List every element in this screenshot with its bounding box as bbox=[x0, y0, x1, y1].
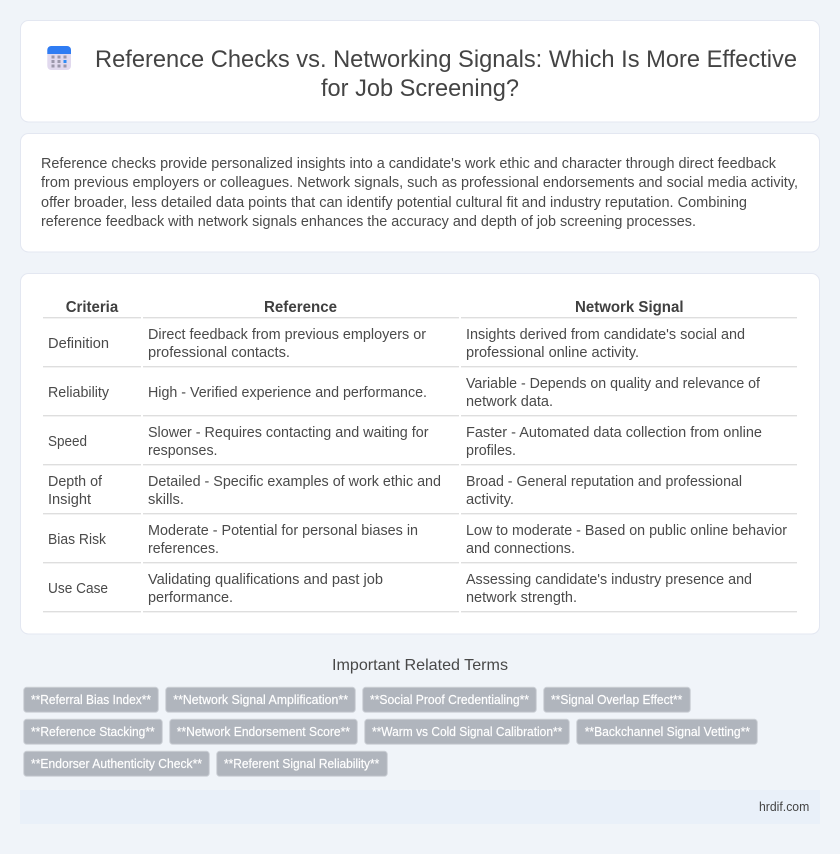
text block: introduction: Reference checks provide personalized insights into a candidate's work ethic and character through direct feedback bbox=[41, 156, 777, 172]
table row: speed: responses. bbox=[148, 443, 218, 459]
table row: use case: performance. bbox=[148, 590, 233, 606]
tag bbox=[217, 751, 387, 776]
tag bbox=[544, 687, 690, 712]
table row: depth of insight: Detailed - Specific examples of work ethic and bbox=[148, 474, 441, 490]
text block: introduction: reference feedback with network signals enhances the accuracy and depth of job screening processes. bbox=[41, 214, 696, 230]
tag bbox=[24, 751, 209, 776]
tag: **Social Proof Credentialing** bbox=[370, 692, 529, 707]
table row: speed: Slower - Requires contacting and waiting for bbox=[148, 425, 429, 441]
tag bbox=[363, 687, 536, 712]
table row: bias risk: Bias Risk bbox=[48, 532, 107, 548]
panel: comparison table bbox=[20, 274, 820, 634]
tag: **Endorser Authenticity Check** bbox=[31, 756, 202, 771]
table row: use case bbox=[48, 572, 752, 606]
table row: depth of insight: activity. bbox=[466, 492, 514, 508]
tag: **Referent Signal Reliability** bbox=[224, 756, 379, 771]
table row: speed: Speed bbox=[48, 434, 87, 450]
tag bbox=[365, 719, 569, 744]
table row: use case: Assessing candidate's industry presence and bbox=[466, 572, 752, 588]
title: Reference Checks vs. Networking Signals: Which Is More Effective bbox=[95, 46, 797, 73]
table row: definition: Definition bbox=[48, 336, 109, 352]
tag bbox=[166, 687, 355, 712]
table row: use case: network strength. bbox=[466, 590, 577, 606]
table row: bias risk: Moderate - Potential for personal biases in bbox=[148, 523, 418, 539]
table row: bias risk: Low to moderate - Based on public online behavior bbox=[466, 523, 787, 539]
table row: depth of insight bbox=[48, 474, 742, 508]
title bbox=[95, 46, 797, 102]
panel: title header bbox=[20, 20, 820, 122]
tag bbox=[24, 687, 158, 712]
text block: introduction bbox=[41, 156, 798, 230]
table row: definition: Insights derived from candidate's social and bbox=[466, 327, 745, 343]
tag: **Network Endorsement Score** bbox=[177, 724, 350, 739]
footer bbox=[20, 790, 820, 824]
table header: Reference bbox=[264, 299, 337, 316]
table row: definition: professional online activity. bbox=[466, 345, 639, 361]
tag: **Network Signal Amplification** bbox=[173, 692, 348, 707]
table row: depth of insight: Broad - General reputation and professional bbox=[466, 474, 742, 490]
title: for Job Screening? bbox=[321, 75, 519, 102]
table row: depth of insight: Depth of bbox=[48, 474, 103, 490]
tag: **Backchannel Signal Vetting** bbox=[585, 724, 750, 739]
table row: reliability bbox=[48, 376, 761, 410]
tag: **Referral Bias Index** bbox=[31, 692, 151, 707]
table row: speed: Faster - Automated data collection from online bbox=[466, 425, 762, 441]
table row: speed bbox=[48, 425, 762, 459]
tag: **Warm vs Cold Signal Calibration** bbox=[372, 724, 562, 739]
table row: use case: Use Case bbox=[48, 581, 108, 597]
table row: depth of insight: skills. bbox=[148, 492, 184, 508]
table row: bias risk: references. bbox=[148, 541, 219, 557]
text block: introduction: from previous employers or colleagues. Network signals, such as professional endorsements and social media activity, bbox=[41, 175, 798, 191]
table row: reliability: High - Verified experience and performance. bbox=[148, 385, 427, 401]
panel: introduction bbox=[20, 134, 820, 252]
table row: use case: Validating qualifications and past job bbox=[148, 572, 383, 588]
table row: definition: professional contacts. bbox=[148, 345, 290, 361]
table row: definition: Direct feedback from previous employers or bbox=[148, 327, 426, 343]
heading: related terms: Important Related Terms bbox=[332, 657, 508, 674]
footer: hrdif.com bbox=[759, 800, 809, 814]
tag bbox=[24, 719, 162, 744]
table row: depth of insight: Insight bbox=[48, 492, 91, 508]
tag bbox=[577, 719, 757, 744]
table header bbox=[66, 299, 683, 316]
table row: reliability: network data. bbox=[466, 394, 553, 410]
tag bbox=[170, 719, 357, 744]
table row: reliability: Variable - Depends on quality and relevance of bbox=[466, 376, 761, 392]
tag: **Signal Overlap Effect** bbox=[551, 692, 682, 707]
table header: Criteria bbox=[66, 299, 118, 316]
table header: Network Signal bbox=[575, 299, 684, 316]
icon: calendar bbox=[47, 46, 71, 70]
table row: reliability: Reliability bbox=[48, 385, 110, 401]
text block: introduction: offer broader, less detailed data points that can identify potential cultural fit and industry reputation. Combining bbox=[41, 195, 747, 211]
table row: bias risk bbox=[48, 523, 787, 557]
table row: definition bbox=[48, 327, 745, 361]
panel: related term tags bbox=[24, 687, 757, 776]
table row: bias risk: and connections. bbox=[466, 541, 575, 557]
tag: **Reference Stacking** bbox=[31, 724, 155, 739]
table row: speed: profiles. bbox=[466, 443, 516, 459]
